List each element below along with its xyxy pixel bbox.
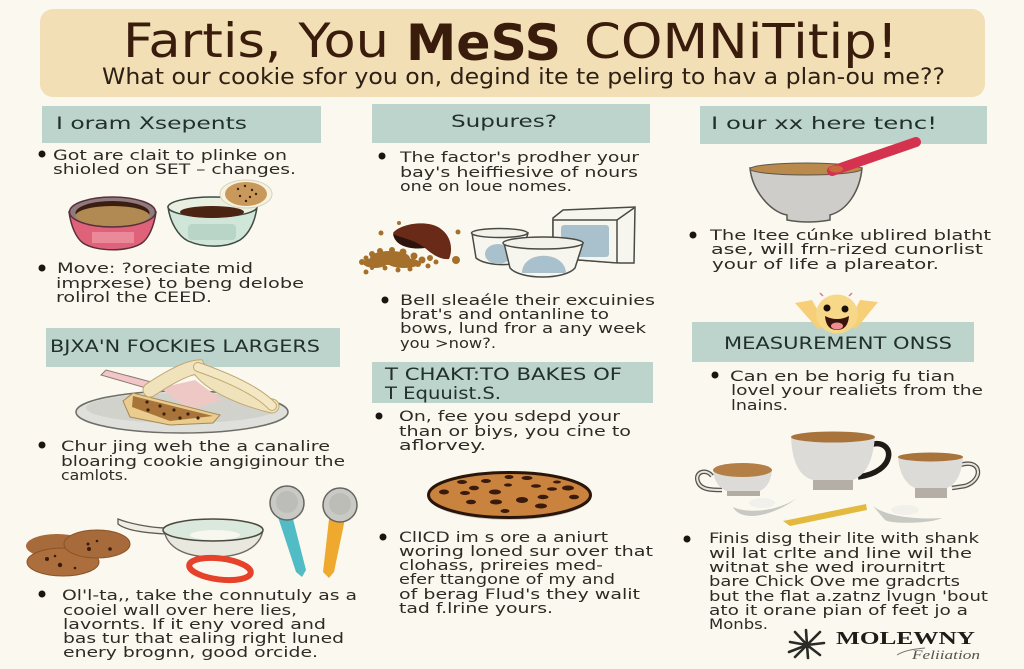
logo: Molewny: MOLEWNY [836,628,975,648]
heading: I oram Xsepents: I oram Xsepents [56,114,247,134]
bullet text block: your of life a plareator. [712,257,939,273]
icon: three coffee cups with saucers and gold stick [697,432,978,526]
heading: I our xx here tenc! [700,106,987,144]
bullet text block: lnains. [731,398,788,414]
bullet text block: ase, will frn-rized cunorlist [711,242,984,258]
icon: large chocolate chip cookie [428,472,590,520]
bullet text block: woring loned sur over that [399,544,654,560]
bullet text block [690,228,992,273]
icon: pink bowl [69,197,156,250]
bullet text block: The factor's prodher your [399,150,639,166]
title: Fartis, You [123,14,389,69]
heading: Bjxa'n Fockies Largers [46,328,340,367]
bullet text block [376,409,631,454]
bullet text block [380,530,654,617]
bullet text block: brat's and ontanline to [400,307,609,323]
subtitle: What our cookie sfor you on, degind ite te pelirg to hav a plan-ou me?? [102,65,945,90]
bullet text block: tad f.lrine yours. [399,601,553,617]
heading: I our xx here tenc!: I our xx here tenc! [711,114,937,134]
bullet text block: bay's heiffiesive of nours [400,165,638,181]
bullet text block: The lteе cúnke ublired blatht [709,228,992,244]
bullet text block: but the flat a.zatnz lvugn 'bout [709,589,989,605]
bullet text block: wil lat crlte and line wil the [709,546,972,562]
icon: measuring spoons [270,486,357,578]
heading: Supures?: Supures? [451,112,557,132]
heading: T Chakt:to Bakes of T Equuist.S.: T CHAKT:TO BAKES OF [384,365,622,385]
icon: containers and box [472,207,635,277]
icon: happy smiley mascot [795,293,878,334]
bullet text block: bare Chick Ove me gradcrts [709,574,960,590]
bullet text block [38,148,296,178]
panel: right column top [690,106,992,273]
bullet text block: enery brognn, good orcide. [63,645,318,661]
logo: Molewny: Feliiation [911,647,980,662]
bullet text block [684,531,989,633]
bullet text block: bloaring cookie angiginour the [61,454,345,470]
panel: left column bottom [26,328,357,661]
logo: Molewny [789,628,980,662]
bullet text block: than or biys, you cine to [399,424,631,440]
bullet text block: witnat she wed irournitrt [709,560,946,576]
bullet text block: of berag Flud's they walit [399,587,641,603]
bullet text block: Ol'l-ta,, take the connutuly as a [62,588,357,604]
bullet text block: lovel your realiets from the [731,383,983,399]
icon: mixing bowl with red spatula [750,142,916,222]
panel: middle column bottom [372,362,654,617]
icon: stacked cookies [26,530,130,576]
heading: Measurement Onss: MEASUREMENT ONSS [724,334,952,354]
bullet text block: Bell sleaéle their excuinies [400,293,655,309]
bullet text block: On, fee you sdepd your [399,409,620,425]
heading: I oram Xsepents [42,106,321,143]
bullet text block: shioled on SET – changes. [53,162,296,178]
bullet text block: aflorvey. [399,438,486,454]
bullet text block: Move: ?oreciate mid [57,261,253,277]
icon: green bowl with cookie [168,180,272,246]
panel: left column top [38,106,321,306]
icon: plate with cookies and pastry [76,367,288,433]
heading: Bjxa'n Fockies Largers: BJXA'N FOCKIES LARGERS [50,337,320,357]
heading: T Chakt:to Bakes of T Equuist.S. [372,362,653,404]
bullet text block: bas tur that ealing right luned [63,631,344,647]
bullet text block [712,369,983,414]
bullet text block: cooiel wall over here lies, [63,603,297,619]
title [123,14,898,72]
heading: Supures? [372,104,650,143]
bullet text block: you >now?. [400,336,496,352]
panel: right column measurements [684,293,989,633]
bullet text block: bows, lund fror a any week [400,321,647,337]
icon: mixing pan [118,519,263,557]
bullet text block: imprxese) to beng delobe [56,276,304,292]
bullet text block: one on loue nomes. [400,179,572,195]
bullet text block: ClICD im s ore a aniurt [399,530,609,546]
icon: red ring [188,555,252,583]
bullet text block [382,293,655,352]
title: COMNiTitip! [584,14,898,70]
bullet text block [38,261,304,306]
title: MeSS [406,14,561,72]
bullet text block: Chur jing weh the a canalire [61,439,330,455]
heading: T Chakt:to Bakes of T Equuist.S.: T Equuist.S. [384,384,501,404]
bullet text block [38,439,345,484]
heading: Measurement Onss [692,322,974,362]
icon: logo star [789,630,824,658]
bullet text block: Monbs. [709,617,768,633]
bullet text block: efer ttangone of my and [399,572,615,588]
bullet text block: clohass, prireies med- [399,558,603,574]
bullet text block: camlots. [61,468,128,484]
bullet text block: Can en be horig fu tian [730,369,955,385]
bullet text block: lavornts. If it eny vored and [63,617,326,633]
title banner [40,9,985,97]
panel: middle column top [359,104,655,352]
bullet text block [38,588,357,661]
bullet text block: rolirol the CEED. [56,290,212,306]
bullet text block [378,150,639,195]
icon: broken chocolate cake and crumbs [359,221,460,274]
bullet text block: Got are clait to plinke on [53,148,287,164]
bullet text block: Finis disg their lite with shank [709,531,980,547]
bullet text block: ato it orane pian of feet jo a [709,603,968,619]
